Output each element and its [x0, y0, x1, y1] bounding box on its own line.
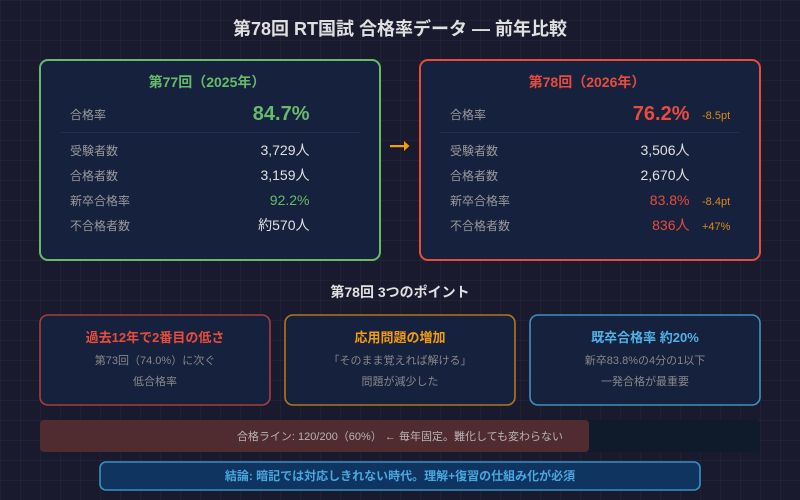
- row: passers: [450, 167, 690, 183]
- panel: 78th exam 2026: [419, 59, 761, 261]
- row: failures: +47%: [702, 221, 730, 233]
- card title: 過去12年で2番目の低さ: [86, 330, 224, 345]
- card text: 一発合格が最重要: [601, 376, 689, 388]
- pass rate row: 合格率: [70, 108, 106, 122]
- title: 第78回 RT国試 合格率データ — 前年比較: [233, 19, 567, 39]
- row: failures: 不合格者数: [450, 219, 510, 233]
- row: new graduate pass rate: 92.2%: [270, 192, 310, 208]
- row: passers: [70, 167, 310, 183]
- row: passers: 3,159人: [260, 167, 310, 183]
- card title: 既卒合格率 約20%: [591, 330, 699, 345]
- pass line bar: [40, 420, 760, 452]
- card: repeat takers: [529, 314, 761, 406]
- card title: 応用問題の増加: [354, 330, 446, 345]
- card text: 第73回（74.0%）に次ぐ: [95, 355, 215, 367]
- row: examinees: 受験者数: [450, 144, 498, 158]
- row: new graduate pass rate: 新卒合格率: [450, 194, 510, 208]
- conclusion: [99, 461, 701, 491]
- row: passers: 2,670人: [640, 167, 690, 183]
- panel: 77th exam 2025: [39, 59, 381, 261]
- row: examinees: [450, 142, 690, 158]
- card text: [95, 354, 215, 388]
- pass rate row: 76.2%: [633, 103, 690, 125]
- section heading: 第78回 3つのポイント: [330, 284, 470, 300]
- bar fill: [40, 420, 589, 452]
- card: applied questions: [284, 314, 516, 406]
- card text: 新卒83.8%の4分の1以下: [585, 355, 705, 367]
- row: new graduate pass rate: 新卒合格率: [70, 194, 130, 208]
- row: failures: [70, 217, 310, 233]
- row: failures: 不合格者数: [70, 219, 130, 233]
- card text: [328, 354, 472, 388]
- pass rate row: 合格率: [450, 108, 486, 122]
- row: failures: [450, 217, 730, 233]
- row: examinees: 3,729人: [260, 142, 310, 158]
- card text: 問題が減少した: [362, 376, 438, 388]
- row: passers: 合格者数: [70, 169, 118, 183]
- conclusion: 結論: 暗記では対応しきれない時代。理解+復習の仕組み化が必須: [225, 469, 575, 483]
- pass rate row: 84.7%: [253, 103, 310, 125]
- row: new graduate pass rate: [70, 192, 310, 208]
- pass rate row: -8.5pt: [702, 110, 730, 122]
- arrow: [390, 141, 410, 151]
- row: failures: 836人: [652, 217, 690, 233]
- row: new graduate pass rate: -8.4pt: [702, 196, 730, 208]
- row: passers: 合格者数: [450, 169, 498, 183]
- row: examinees: 3,506人: [640, 142, 690, 158]
- pass rate row: [70, 103, 310, 125]
- card text: 低合格率: [133, 376, 177, 388]
- card text: 「そのまま覚えれば解ける」: [328, 355, 472, 367]
- card: second lowest: [39, 314, 271, 406]
- row: examinees: [70, 142, 310, 158]
- row: new graduate pass rate: [450, 192, 730, 208]
- row: examinees: 受験者数: [70, 144, 118, 158]
- panel heading: 第78回（2026年）: [529, 74, 645, 90]
- card text: [585, 354, 705, 388]
- pass rate row: [450, 103, 730, 125]
- row: new graduate pass rate: 83.8%: [650, 192, 690, 208]
- panel heading: 第77回（2025年）: [149, 74, 265, 90]
- row: failures: 約570人: [258, 217, 310, 233]
- bar label: 合格ライン: 120/200（60%） ← 毎年固定。難化しても変わらない: [237, 431, 563, 443]
